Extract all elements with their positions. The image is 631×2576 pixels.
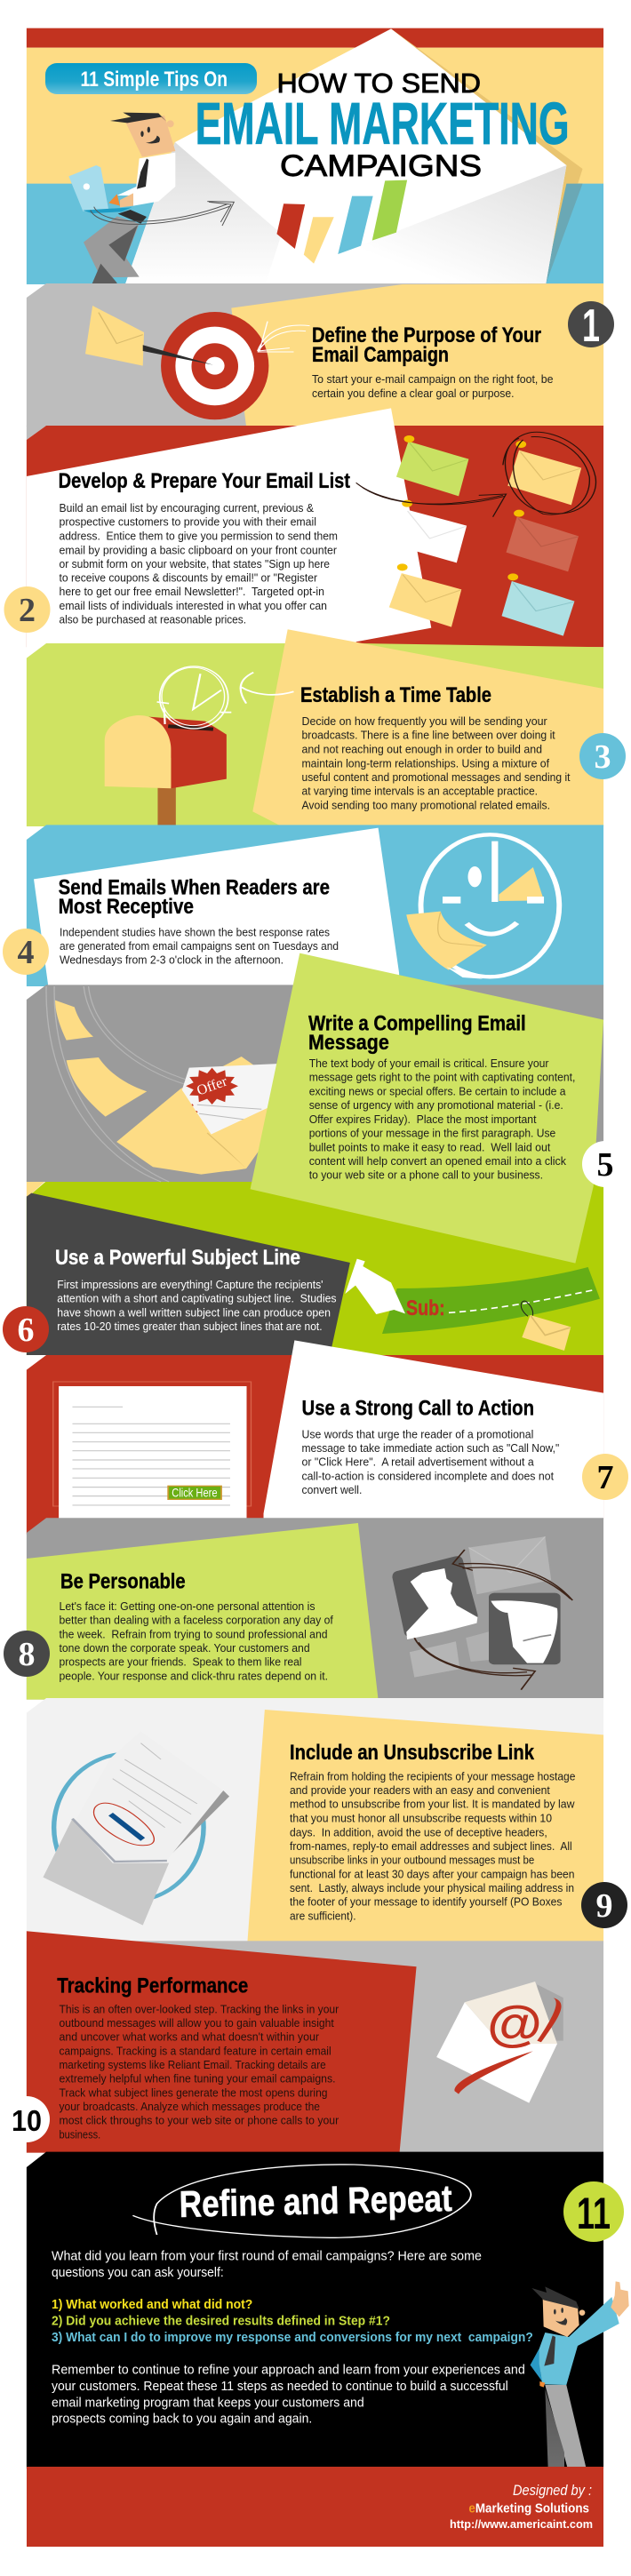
- panel: step 10 tracking: [4, 1931, 603, 2153]
- body text: maintain long-term relationships. Using a mixture of: [302, 756, 549, 770]
- body text: functional for at least 30 days after your campaign has been: [290, 1867, 574, 1880]
- heading: Be Personable: [60, 1570, 186, 1594]
- body text: are generated from email campaigns sent on Tuesdays and: [60, 939, 339, 953]
- body text: useful content and promotional messages and sending it: [302, 770, 571, 784]
- icon: at sign: @: [487, 1995, 542, 2051]
- heading: Tracking Performance: [57, 1974, 248, 1998]
- body text: sent. Lastly, always include your physical mailing address in: [290, 1881, 574, 1894]
- number badge 11: [563, 2181, 624, 2242]
- body text: the week. Refrain from trying to sound professional and: [59, 1627, 327, 1640]
- number badge 6: 6: [18, 1312, 34, 1349]
- panel: step 7 call to action: [27, 1340, 628, 1535]
- closing text: your customers. Repeat these 11 steps as needed to continue to build a successful: [52, 2379, 508, 2394]
- heading: [308, 1011, 526, 1055]
- character: man on laptop riding envelope: [68, 113, 234, 296]
- body text: portions of your message in the first paragraph. Use: [309, 1127, 555, 1140]
- heading: [312, 323, 541, 367]
- body text: Let's face it: Getting one-on-one personal attention is: [59, 1599, 316, 1613]
- body text: call-to-action is considered incomplete and does not: [302, 1469, 554, 1482]
- body text: people. Your response and click-thru rates depend on it.: [59, 1669, 328, 1682]
- body text: have shown a well written subject line can produce open: [57, 1305, 331, 1319]
- panel: step 8 be personable: [4, 1518, 603, 1700]
- body text: most click throughs to your web site or phone calls to your: [59, 2114, 339, 2127]
- body text: prospects are your friends. Speak to them like real: [59, 1655, 302, 1669]
- illustration: two people exchanging envelopes: [392, 1536, 572, 1690]
- title: HOW TO SEND: [277, 68, 481, 99]
- body text: prospective customers to provide you with their email: [59, 515, 316, 529]
- body text: Avoid sending too many promotional related emails.: [302, 798, 550, 811]
- heading: Send Emails When Readers are: [59, 876, 330, 900]
- heading: Write a Compelling Email: [308, 1011, 526, 1035]
- body text: [302, 714, 571, 811]
- body text: bullet points to make it easy to read. Well laid out: [309, 1140, 551, 1153]
- credit: designed by: Designed by :: [513, 2482, 592, 2499]
- body text: [290, 1769, 575, 1922]
- heading: Use a Powerful Subject Line: [55, 1246, 300, 1270]
- number badge 5: [582, 1141, 628, 1187]
- body text: and provide your readers with an easy and convenient: [290, 1783, 550, 1797]
- credit: url: http://www.americaint.com: [450, 2517, 593, 2531]
- character: man pointing up: [531, 2281, 629, 2468]
- body text: tone down the corporate speak. Your customers and: [59, 1641, 310, 1655]
- body text: content will help convert an opened email into a click: [309, 1154, 566, 1168]
- body text: are sufficient).: [290, 1909, 356, 1922]
- body text: convert well.: [302, 1483, 362, 1496]
- body text: that you must honor all unsubscribe requests within 10: [290, 1811, 552, 1824]
- body text: To start your e-mail campaign on the right foot, be: [312, 372, 553, 386]
- panel: step 6 subject line: [3, 1180, 603, 1355]
- heading: [59, 876, 330, 919]
- illustration: subject line band with pointing hand: [345, 1259, 600, 1351]
- body text: rates 10-20 times greater than subject lines that are not.: [57, 1320, 323, 1333]
- body text: address. Entice them to give you permission to send them: [59, 529, 338, 542]
- number badge 6: [3, 1306, 49, 1352]
- number badge 9: [581, 1882, 627, 1928]
- arrow and scribble circle: [356, 432, 595, 517]
- body text: from-names, reply-to email addresses and subject lines. All: [290, 1839, 572, 1853]
- panel: step 11 refine and repeat: [27, 2152, 629, 2468]
- closing text: Remember to continue to refine your approach and learn from your experiences and: [52, 2363, 525, 2378]
- footer panel: [27, 2467, 603, 2547]
- body text: days. In addition, avoid the use of deceptive headers,: [290, 1825, 547, 1838]
- body text: Track what subject lines generate the most opens during: [59, 2086, 327, 2099]
- body text: business.: [59, 2127, 100, 2141]
- header panel: [27, 28, 603, 296]
- body text: Build an email list by encouraging current, previous &: [59, 501, 314, 514]
- panel: step 2 email list: [4, 408, 603, 660]
- body text: to your web site or a phone call to your business.: [309, 1168, 543, 1182]
- illustration: envelope dart hitting target: [85, 306, 310, 419]
- text panel: [251, 953, 603, 1264]
- body text: Offer expires Friday). Place the most important: [309, 1113, 537, 1126]
- body text: the footer of your message to identify yourself (PO Boxes: [290, 1895, 563, 1909]
- button label: Click Here: [172, 1485, 218, 1499]
- body text: broadcasts. There is a fine line between over doing it: [302, 729, 555, 742]
- illustration: email page with click button: [53, 1382, 251, 1519]
- heading: Message: [308, 1031, 389, 1055]
- body text: here to get our free email Newsletter!". Targeted opt-in: [59, 585, 324, 598]
- body text: and not reaching out enough in order to build and: [302, 742, 542, 755]
- panel: step 9 unsubscribe: [27, 1698, 627, 1942]
- pill badge: 11 Simple Tips On: [80, 68, 228, 92]
- illustration: pinned envelopes: [389, 435, 581, 636]
- body text: [59, 1599, 333, 1682]
- number badge 10: [4, 2096, 50, 2142]
- number badge 2: 2: [19, 592, 36, 629]
- body text: extremely helpful when fine tuning your email campaigns.: [59, 2072, 336, 2086]
- body text: or "Click Here". A retail advertisement without a: [302, 1455, 534, 1469]
- panel: step 4 send when receptive: [3, 825, 603, 986]
- body text: [302, 1427, 560, 1496]
- body text: better than dealing with a faceless corporation any day of: [59, 1614, 333, 1627]
- body text: certain you define a clear goal or purpose.: [312, 387, 514, 400]
- question list: 3) What can I do to improve my response and conversions for my next campaign?: [52, 2330, 533, 2345]
- body text: exciting news or special offers. Be certain to include a: [309, 1084, 566, 1097]
- credit: company: eMarketing Solutions: [468, 2501, 589, 2516]
- closing text: email marketing program that keeps your customers and: [52, 2395, 364, 2410]
- number badge 2: [4, 586, 50, 633]
- number badge 7: [582, 1454, 628, 1500]
- intro text: [52, 2248, 482, 2280]
- heading: Define the Purpose of Your: [312, 323, 541, 347]
- body text: your broadcasts. Analyze which messages produce the: [59, 2100, 320, 2113]
- body text: also be purchased at reasonable prices.: [59, 613, 246, 626]
- heading: Develop & Prepare Your Email List: [59, 469, 350, 493]
- number badge 1: [568, 300, 614, 352]
- body text: email by providing a basic clipboard on your front counter: [59, 543, 338, 556]
- label: Sub: Sub:: [406, 1296, 445, 1320]
- body text: attention with a short and captivating subject line. Studies: [57, 1292, 337, 1305]
- body text: The text body of your email is critical. Ensure your: [309, 1057, 549, 1070]
- body text: outbound messages will allow you to gain valuable insight: [59, 2016, 334, 2030]
- body text: campaigns. Tracking is a standard feature in certain email: [59, 2044, 331, 2057]
- number badge 8: [4, 1631, 50, 1677]
- illustration: open envelope with bar chart: [125, 28, 583, 283]
- heading with scribble ellipse: Refine and Repeat: [179, 2177, 452, 2225]
- body text: First impressions are everything! Capture the recipients': [57, 1278, 323, 1291]
- question list: [52, 2297, 533, 2345]
- closing text: prospects coming back to you again and again.: [52, 2412, 312, 2427]
- body text: [59, 501, 338, 626]
- body text: marketing systems like Reliant Email. Tracking details are: [59, 2058, 326, 2071]
- title: [196, 68, 570, 183]
- illustration: at-sign envelope: [436, 1982, 563, 2103]
- body text: [60, 925, 339, 967]
- heading: Establish a Time Table: [300, 683, 491, 707]
- number badge 10: 10: [12, 2104, 42, 2137]
- number badge 11: 11: [577, 2189, 611, 2238]
- question list: 2) Did you achieve the desired results defined in Step #1?: [52, 2314, 390, 2329]
- body text: sense of urgency with any promotional material - (i.e.: [309, 1098, 563, 1112]
- heading: Email Campaign: [312, 343, 449, 367]
- number badge 3: [579, 733, 626, 779]
- body text: Refrain from holding the recipients of your message hostage: [290, 1769, 575, 1782]
- heading with scribble ellipse: [132, 2165, 471, 2237]
- number badge 5: 5: [597, 1146, 613, 1184]
- body text: This is an often over-looked step. Tracking the links in your: [59, 2002, 339, 2015]
- heading: Use a Strong Call to Action: [302, 1397, 534, 1421]
- number badge 1: 1: [582, 300, 600, 352]
- body text: message gets right to the point with captivating content,: [309, 1071, 575, 1084]
- heading: Most Receptive: [59, 895, 194, 919]
- number badge 7: 7: [597, 1459, 613, 1496]
- closing text: [52, 2363, 525, 2427]
- body text: [59, 2002, 339, 2141]
- body text: method to unsubscribe from your list. It is mandated by law: [290, 1798, 575, 1811]
- panel: step 3 time table: [27, 629, 626, 826]
- label: Offer: Offer: [195, 1073, 230, 1098]
- body text: Decide on how frequently you will be sending your: [302, 714, 547, 728]
- panel: step 5 compelling message: [27, 953, 628, 1264]
- body text: email lists of individuals interested in what you offer can: [59, 599, 327, 612]
- body text: and uncover what works and what doesn't within your: [59, 2030, 320, 2044]
- body text: Independent studies have shown the best response rates: [60, 925, 330, 938]
- body text: [309, 1057, 575, 1182]
- body text: Wednesdays from 2-3 o'clock in the afternoon.: [60, 953, 284, 967]
- body text: unsubscribe links in your outbound messages must be: [290, 1854, 534, 1867]
- title: CAMPAIGNS: [280, 149, 482, 183]
- heading: Include an Unsubscribe Link: [290, 1741, 535, 1765]
- panel: step 1 define purpose: [27, 283, 614, 427]
- number badge 8: 8: [18, 1636, 36, 1673]
- number badge 4: [3, 929, 49, 975]
- body text: at varying time intervals is an acceptable practice.: [302, 785, 538, 798]
- body text: [57, 1278, 337, 1333]
- number badge 9: 9: [595, 1887, 613, 1925]
- pill badge: [45, 63, 257, 94]
- illustration: envelope with unsubscribe letter: [43, 1731, 229, 1926]
- number badge 3: 3: [594, 738, 611, 776]
- number badge 4: 4: [18, 934, 34, 971]
- intro text: What did you learn from your first round of email campaigns? Here are some: [52, 2248, 482, 2263]
- question list: 1) What worked and what did not?: [52, 2297, 252, 2312]
- body text: [312, 372, 553, 400]
- body text: Use words that urge the reader of a promotional: [302, 1427, 533, 1440]
- body text: message to take immediate action such as "Call Now,": [302, 1441, 560, 1455]
- body text: to receive coupons & discounts by email!" or "Register: [59, 571, 318, 585]
- illustration: flying envelopes and offer: [46, 986, 300, 1182]
- intro text: questions you can ask yourself:: [52, 2265, 224, 2280]
- illustration: mailbox with clock: [105, 666, 293, 825]
- illustration: smiling clock and envelope: [406, 834, 559, 979]
- body text: or submit form on your website, that states "Sign up here: [59, 557, 330, 570]
